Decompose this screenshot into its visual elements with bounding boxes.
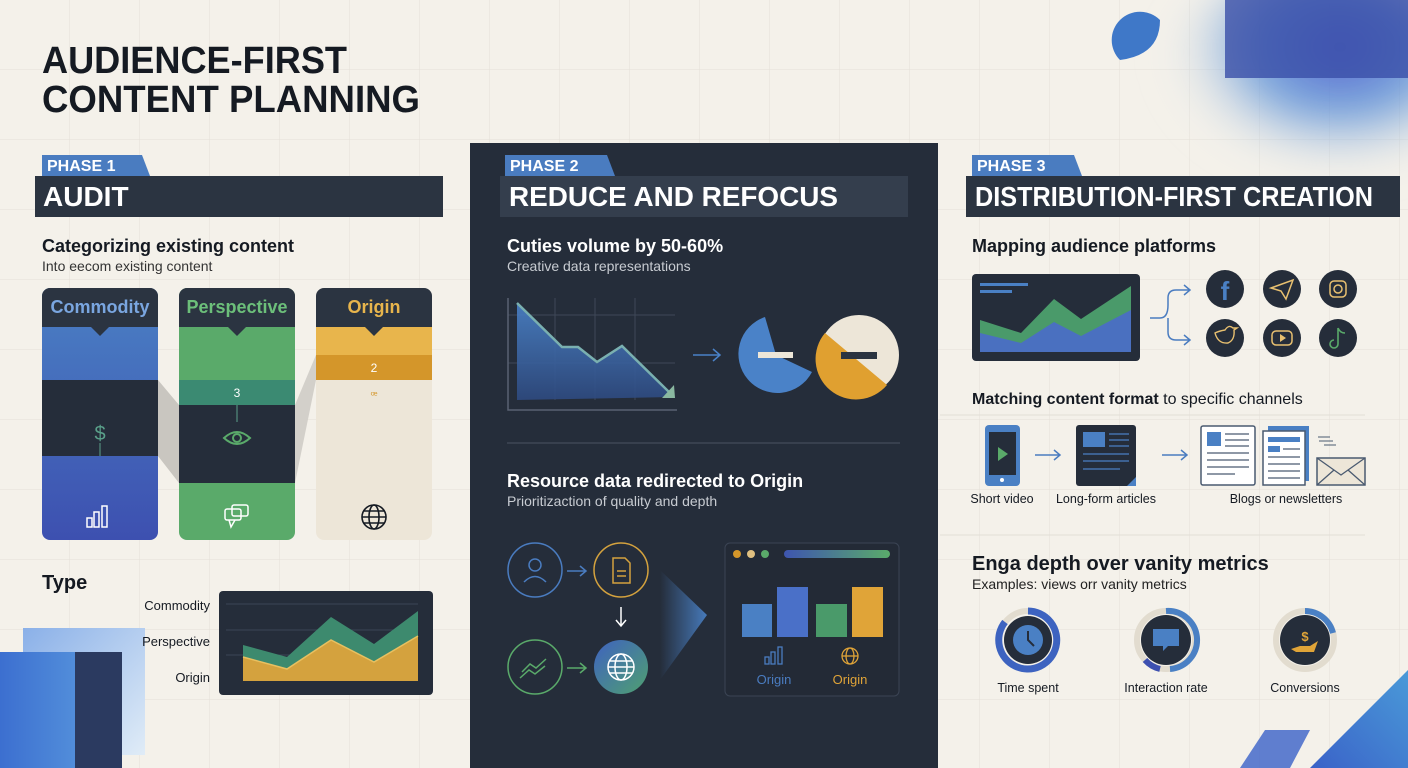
content format icons: Blogs or newsletters: [1230, 492, 1342, 506]
text: categorizing: [42, 236, 294, 274]
dashboard window: Origin: [833, 672, 867, 687]
metric rings: Interaction rate: [1124, 681, 1208, 695]
column: Origin: ꟹ: [370, 390, 378, 402]
column: Commodity: $: [94, 423, 106, 445]
text: cuties volume: [507, 236, 723, 274]
text: resource redirected: Resource data redirected to Origin: [507, 471, 803, 491]
dashboard window: [725, 543, 899, 696]
chart: declining area: [508, 298, 677, 410]
chart: type area chart: Origin: [175, 670, 210, 685]
text: mapping audience: Mapping audience platforms: [972, 236, 1216, 256]
text: resource redirected: [507, 443, 900, 509]
chart: platform area: [972, 274, 1140, 361]
heading: Type: Type: [42, 572, 87, 594]
phase 3 header: PHASE 3: [977, 158, 1046, 175]
text: engagement depth: Enga depth over vanity metrics: [972, 553, 1269, 575]
phase 2 header: [500, 155, 908, 217]
metric rings: Time spent: [997, 681, 1059, 695]
phase 1 header: AUDIT: [43, 181, 129, 212]
title: CONTENT PLANNING: [42, 79, 420, 121]
flow diagram: [508, 543, 707, 694]
pie charts: [738, 315, 899, 399]
column: Origin: 2: [371, 361, 378, 375]
text: categorizing: Categorizing existing content: [42, 236, 294, 256]
arrow: brace to socials: [1150, 285, 1190, 345]
column: Perspective: Perspective: [186, 297, 288, 317]
phase 2 header: PHASE 2: [510, 158, 579, 175]
text: cuties volume: Creative data representations: [507, 258, 691, 274]
phase 1 header: PHASE 1: [47, 158, 116, 175]
title: [42, 40, 420, 121]
phase 3 header: DISTRIBUTION-FIRST CREATION: [975, 181, 1373, 212]
phase 3 header: [966, 155, 1400, 217]
text: engagement depth: Examples: views orr vanity metrics: [972, 576, 1187, 592]
text: matching content format: Matching content format to specific channels: [972, 391, 1303, 408]
column: Perspective: 3: [234, 386, 241, 400]
title: AUDIENCE-FIRST: [42, 40, 347, 82]
column: Commodity: Commodity: [50, 297, 150, 317]
text: categorizing: Into eecom existing content: [42, 258, 213, 274]
content format icons: Short video: [970, 492, 1034, 506]
icons: social platforms: [1206, 270, 1357, 357]
decoration: top-right gradient blob: [1112, 0, 1408, 190]
content format icons: [970, 425, 1365, 506]
icons: social platforms: f: [1221, 276, 1230, 306]
text: resource redirected: Prioritizaction of quality and depth: [507, 493, 717, 509]
column: Origin: [316, 288, 432, 540]
connectors between columns: [158, 355, 316, 483]
text: engagement depth: [940, 535, 1365, 592]
panel: phase 2 dark background: [470, 143, 938, 768]
text: cuties volume: Cuties volume by 50-60%: [507, 236, 723, 256]
metric rings: [997, 611, 1340, 695]
phase 1 header: [35, 155, 443, 217]
metric rings: Conversions: [1270, 681, 1340, 695]
column: Commodity: [42, 288, 158, 540]
dashboard window: Origin: [757, 672, 791, 687]
column: Perspective: [179, 288, 295, 540]
column: Origin: Origin: [348, 297, 400, 317]
phase 2 header: REDUCE AND REFOCUS: [509, 181, 838, 212]
chart: type area chart: Perspective: [142, 634, 210, 649]
metric rings: $: [1301, 629, 1309, 644]
chart: type area chart: Commodity: [144, 598, 210, 613]
content format icons: Long-form articles: [1056, 492, 1156, 506]
arrow: chart to pies: [693, 349, 720, 361]
decoration: bottom-right triangles: [1240, 670, 1408, 768]
decoration: bottom-left squares: [0, 628, 145, 768]
chart: type area chart: [142, 591, 433, 695]
